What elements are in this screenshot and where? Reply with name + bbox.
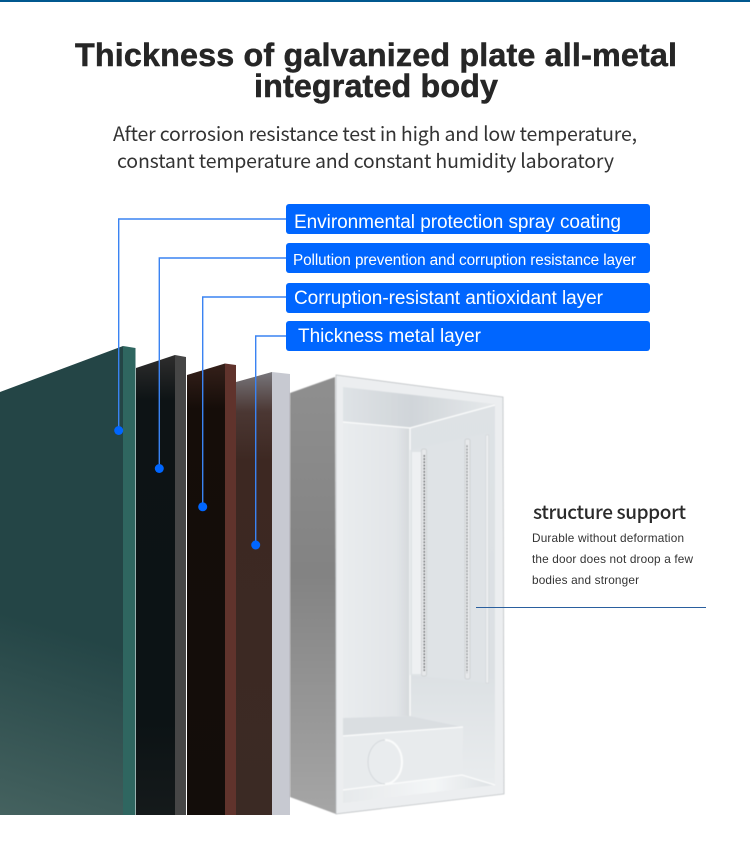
cabinet left inner wall xyxy=(343,422,410,718)
marker dots xyxy=(114,426,260,550)
top bar xyxy=(0,0,750,2)
cabinet ceiling xyxy=(343,387,495,428)
label: environmental protection spray coating xyxy=(286,204,650,234)
label: thickness metal xyxy=(286,321,650,351)
layer: green spray coating xyxy=(0,346,136,815)
layer: brown antioxidant xyxy=(187,364,236,815)
cabinet xyxy=(290,375,504,814)
cabinet back wall xyxy=(410,404,495,785)
title: Thickness of galvanized plate all-metal xyxy=(75,37,677,73)
label: pollution prevention: Pollution prevention and corruption resistance layer xyxy=(293,252,636,269)
label: corruption-resistant: Corruption-resistant antioxidant layer xyxy=(294,288,604,309)
side slot xyxy=(486,435,488,683)
callout: structure support: Durable without deformation xyxy=(532,531,684,545)
callout: structure support: structure support xyxy=(533,498,686,525)
rail left xyxy=(422,449,426,676)
label: thickness metal: Thickness metal layer xyxy=(298,326,482,347)
subtitle: After corrosion resistance test in high and low temperature, xyxy=(113,118,637,147)
cabinet side wall xyxy=(290,377,336,814)
subtitle: constant temperature and constant humidity laboratory xyxy=(117,145,614,174)
cabinet front frame xyxy=(336,375,504,814)
mounting panel xyxy=(410,433,487,683)
light strip xyxy=(412,452,421,674)
label: corruption-resistant xyxy=(286,283,650,313)
label: environmental protection spray coating: Environmental protection spray coating xyxy=(294,212,621,233)
layer: black pollution prevention xyxy=(136,355,186,815)
layer: thick metal xyxy=(236,372,290,815)
cabinet lower front xyxy=(343,727,463,790)
callout: structure support xyxy=(532,498,693,587)
cable knockout xyxy=(368,740,402,784)
title xyxy=(75,37,677,104)
label: pollution prevention xyxy=(286,243,650,273)
cabinet highlights xyxy=(343,405,495,790)
leader lines xyxy=(119,219,287,545)
subtitle xyxy=(113,118,637,174)
callout: structure support: bodies and stronger xyxy=(532,573,639,587)
rail right xyxy=(465,439,470,679)
cabinet shelf xyxy=(343,716,463,736)
callout line xyxy=(476,606,706,608)
cabinet floor xyxy=(343,775,495,803)
callout: structure support: the door does not droop a few xyxy=(532,552,693,566)
title: integrated body xyxy=(254,68,498,104)
